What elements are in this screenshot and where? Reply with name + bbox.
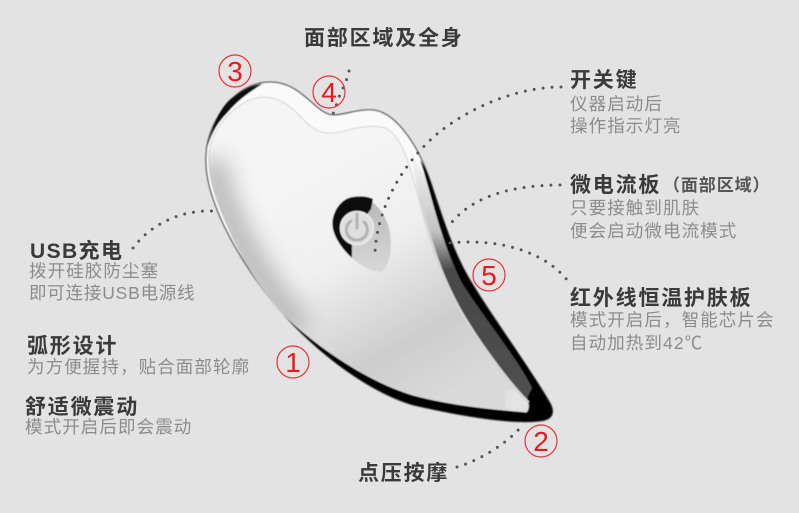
heading: 弧形设计 [27, 334, 118, 358]
description line 2: 便会启动微电流模式 [570, 221, 737, 241]
marker 1 [277, 346, 309, 378]
feature: 舒适微震动 [25, 395, 192, 437]
description line 2: 操作指示灯亮 [570, 116, 682, 136]
leader line: 开关键 [375, 87, 561, 252]
marker 5 [473, 259, 505, 291]
description: 拨开硅胶防尘塞 [29, 261, 159, 281]
face shading [212, 160, 525, 412]
heading: 红外线恒温护肤板 [570, 287, 752, 310]
marker 1: 1 [285, 347, 301, 378]
heading: 舒适微震动 [25, 395, 139, 419]
marker 2 [525, 425, 557, 457]
recess teardrop [332, 197, 391, 272]
feature: 微电流板 [570, 174, 770, 241]
feature: USB充电 [29, 240, 195, 303]
right rim: grey band [410, 150, 550, 403]
feature: 开关键 [570, 69, 682, 136]
marker 3 [219, 55, 251, 87]
device outer edge [206, 82, 553, 422]
marker 4: 4 [321, 77, 337, 108]
description: 仪器启动后 [570, 94, 663, 114]
leader line: 微电流板 [452, 185, 560, 222]
black rim: upper left [207, 84, 262, 148]
marker 5: 5 [481, 260, 497, 291]
power button [340, 212, 374, 244]
heading note: （面部区域） [663, 175, 770, 195]
leader line: 点压按摩 [457, 426, 522, 467]
icon: power symbol [346, 214, 367, 240]
heading: 微电流板 [570, 174, 661, 197]
title: 面部区域及全身: 面部区域及全身 [304, 26, 464, 50]
button recess [332, 196, 391, 272]
recess black ring [332, 196, 373, 258]
description line 2: 自动加热到42℃ [570, 333, 703, 353]
description: 模式开启后，智能芯片会 [570, 310, 775, 330]
leader line: 面部区域及全身 [331, 71, 349, 121]
marker 2: 2 [533, 426, 549, 457]
description: 模式开启后即会震动 [25, 417, 192, 437]
right rim: black edge [420, 160, 550, 403]
description: 只要接触到肌肤 [570, 198, 700, 218]
feature: 弧形设计 [27, 334, 250, 377]
heading: 开关键 [570, 69, 638, 92]
leader line: 红外线恒温护肤板 [450, 242, 568, 281]
device: massage gua sha board [206, 82, 553, 422]
heading: USB充电 [30, 240, 123, 263]
marker 4 [313, 76, 345, 108]
device face [209, 97, 528, 412]
description line 2: 即可连接USB电源线 [29, 283, 195, 303]
feature: 红外线恒温护肤板 [570, 287, 775, 353]
feature: 点压按摩: 点压按摩 [358, 462, 449, 485]
black rim: tip and lower edge [277, 307, 553, 422]
leader line: USB充电 [133, 211, 212, 248]
marker 3: 3 [227, 56, 243, 87]
description: 为方便握持，贴合面部轮廓 [27, 357, 250, 377]
right face edge highlight [420, 203, 528, 403]
